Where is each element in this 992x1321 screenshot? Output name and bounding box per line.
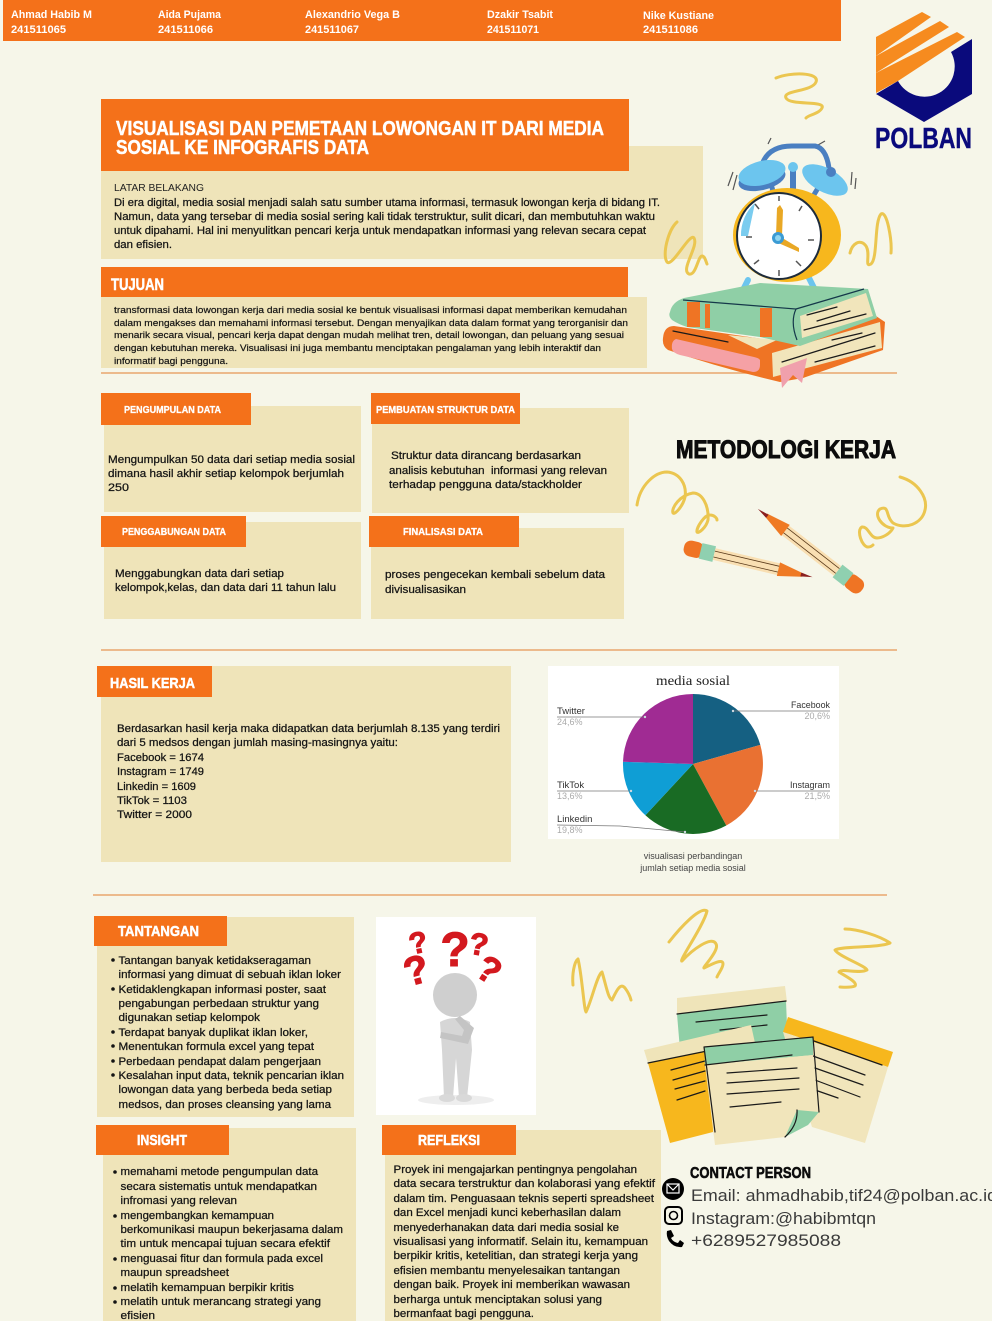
heading: hasil kerja	[97, 666, 212, 697]
logo: POLBAN	[875, 12, 972, 155]
pie chart: media sosial: Linkedin	[557, 814, 592, 825]
card: finalisasi data: proses pengecekan kembali sebelum data	[385, 569, 606, 581]
card: penggabungan data: kelompok,kelas, dan data dari 11 tahun lalu	[115, 582, 336, 594]
icon: sticky notes and squiggles	[573, 910, 893, 1145]
card: pengumpulan data: Mengumpulkan 50 data dari setiap media sosial	[108, 454, 355, 466]
text: tujuan body	[114, 305, 628, 367]
icon: email	[662, 1178, 684, 1200]
text: hasil kerja body	[117, 723, 500, 821]
text: hasil kerja body: TikTok = 1103	[117, 795, 187, 807]
heading: refleksi: REFLEKSI	[418, 1132, 480, 1149]
list: insight: mengembangkan kemampuan	[120, 1210, 274, 1222]
text: tujuan body: menarik secara visual, pencari kerja dapat dengan mudah melihat tren, detail lowongan, dan peluang yang sesuai	[114, 330, 624, 341]
list: tantangan: Ketidaklengkapan informasi poster, saat	[118, 984, 326, 996]
pie chart: media sosial: Facebook	[791, 700, 830, 711]
text: refleksi body: efisien membantu menyelesaikan tantangan	[394, 1265, 620, 1277]
pie chart: media sosial: TikTok	[557, 780, 584, 791]
text: tujuan body: informatif bagi pengguna.	[114, 356, 228, 367]
header bar: team members: Nike Kustiane	[643, 10, 714, 22]
image: thinking figure with question marks: ?	[466, 926, 491, 963]
list: tantangan: digunakan setiap kelompok	[118, 1012, 261, 1024]
heading: metodologi kerja: METODOLOGI KERJA	[676, 436, 896, 464]
heading: refleksi	[382, 1125, 516, 1155]
image: thinking figure with question marks: ?	[469, 946, 509, 993]
image: thinking figure with question marks: ?	[406, 925, 431, 962]
list: insight: infromasi yang relevan	[120, 1195, 237, 1207]
heading: insight: INSIGHT	[137, 1132, 187, 1149]
text: latar belakang body: untuk dipahami. Hal ini menyulitkan pencari kerja untuk mendapatkan informasi yang relevan secara cepat	[114, 225, 646, 237]
caption: pie chart: jumlah setiap media sosial	[639, 863, 746, 873]
squiggle: top right	[776, 74, 822, 118]
card: finalisasi data	[369, 516, 624, 619]
card: pengumpulan data: 250	[108, 482, 129, 494]
text: refleksi body: dan Excel menjadi kunci keberhasilan dalam	[394, 1207, 621, 1219]
pie chart: media sosial	[548, 666, 839, 839]
header bar: team members: 241511086	[643, 24, 698, 36]
pie chart: media sosial: 21,5%	[804, 791, 830, 801]
card: penggabungan data: Menggabungkan data dari setiap	[115, 568, 284, 580]
text: refleksi body: menyederhanakan data dari media sosial ke	[394, 1222, 619, 1234]
text: refleksi body: bermanfaat bagi pengguna.	[394, 1308, 534, 1320]
text: hasil kerja body: dari 5 medsos dengan jumlah masing-masingnya yaitu:	[117, 737, 398, 749]
card: pembuatan struktur data: PEMBUATAN STRUKTUR DATA	[376, 405, 515, 416]
text: phone: +6289527985088	[691, 1231, 841, 1250]
text: latar belakang body: Namun, data yang tersebar di media sosial sering kali tidak terstruktur, sulit dicari, dan membutuhkan waktu	[114, 211, 655, 223]
heading: tujuan: TUJUAN	[111, 275, 164, 294]
panel: refleksi	[382, 1125, 661, 1321]
text: refleksi body: visualisasi yang informatif. Selain itu, kemampuan	[394, 1236, 648, 1248]
header bar: team members: 241511067	[305, 24, 359, 36]
text: refleksi body: dengan baik. Proyek ini memberikan wawasan	[394, 1279, 630, 1291]
caption: pie chart	[639, 851, 746, 873]
caption: pie chart: visualisasi perbandingan	[644, 851, 742, 861]
heading: tantangan	[94, 916, 227, 946]
text: instagram: Instagram:@habibmtqn	[691, 1209, 876, 1228]
card: penggabungan data: PENGGABUNGAN DATA	[122, 527, 226, 538]
text: tujuan body: transformasi data lowongan kerja dari media sosial ke bentuk visualisasi informasi dapat memberikan kemudahan	[114, 305, 627, 316]
icon: alarm clock on books	[663, 138, 891, 388]
pie chart: media sosial: media sosial	[656, 674, 730, 689]
text: hasil kerja body: Twitter = 2000	[117, 809, 192, 821]
panel: tujuan	[101, 267, 647, 368]
pencil two	[753, 503, 867, 596]
pie chart: media sosial: 13,6%	[557, 791, 583, 801]
heading: insight	[96, 1125, 229, 1155]
header bar: team members: 241511066	[158, 24, 213, 36]
panel: tantangan	[94, 916, 354, 1117]
text: email: Email: ahmadhabib,tif24@polban.ac.id	[691, 1186, 992, 1205]
title	[101, 99, 629, 171]
text: latar belakang body: Di era digital, media sosial menjadi salah satu sumber utama informasi, termasuk lowongan kerja di bidang IT.	[114, 197, 660, 209]
title: SOSIAL KE INFOGRAFIS DATA	[116, 137, 369, 159]
heading: tujuan	[101, 267, 628, 297]
list: tantangan	[111, 955, 344, 1111]
text: latar belakang body	[114, 197, 660, 251]
card: penggabungan data	[101, 516, 361, 619]
pie chart: media sosial: 24,6%	[557, 717, 583, 727]
image: thinking figure with question marks: ?	[399, 947, 434, 995]
green book	[669, 283, 877, 346]
header bar: team members: Alexandrio Vega B	[305, 9, 400, 21]
list: insight: tim untuk mencapai tujuan secara efektif	[120, 1238, 331, 1250]
card: pembuatan struktur data: terhadap pengguna data/stackholder	[389, 479, 582, 491]
text: tujuan body: dalam mengakses dan memahami informasi tersebut. Dengan menyajikan data dalam format yang terorganisir dan	[114, 318, 628, 329]
heading: hasil kerja: HASIL KERJA	[110, 675, 195, 692]
orange book	[663, 316, 885, 382]
contact person	[662, 1165, 992, 1250]
list: insight: menguasai fitur dan formula pada excel	[120, 1253, 323, 1265]
list: tantangan: medsos, dan proses cleansing yang lama	[118, 1099, 332, 1111]
squiggles beside clock	[665, 138, 891, 274]
icon: pencils and squiggles	[637, 472, 926, 596]
heading: tantangan: TANTANGAN	[118, 923, 199, 940]
text: latar belakang body: dan efisien.	[114, 239, 172, 251]
list: tantangan: Perbedaan pendapat dalam pengerjaan	[118, 1056, 321, 1068]
list: tantangan: pengabungan perbedaan struktur yang	[118, 998, 319, 1010]
list: insight: memahami metode pengumpulan data	[120, 1166, 319, 1178]
header bar: team members: 241511071	[487, 24, 539, 36]
list: tantangan: Menentukan formula excel yang tepat	[118, 1041, 314, 1053]
image: thinking figure with question marks: ?	[440, 924, 470, 977]
text: refleksi body: berharga untuk menciptakan solusi yang	[394, 1294, 602, 1306]
text: refleksi body: Proyek ini mengajarkan pentingnya pengolahan	[394, 1164, 637, 1176]
pie chart: media sosial: Twitter	[557, 706, 585, 717]
list: tantangan: informasi yang dimuat di sebuah iklan loker	[118, 969, 341, 981]
card: pembuatan struktur data	[371, 393, 629, 513]
text: hasil kerja body: Berdasarkan hasil kerja maka didapatkan data berjumlah 8.135 yang terdiri	[117, 723, 500, 735]
icon: instagram	[665, 1207, 682, 1224]
card: pengumpulan data: dimana hasil akhir setiap kelompok berjumlah	[108, 468, 344, 480]
text: refleksi body: berpikir kritis, ketelitian, dan strategi kerja yang	[394, 1250, 638, 1262]
title: VISUALISASI DAN PEMETAAN LOWONGAN IT DARI MEDIA	[116, 118, 604, 140]
text: hasil kerja body: Instagram = 1749	[117, 766, 204, 778]
header bar: team members: Dzakir Tsabit	[487, 9, 553, 21]
header bar: team members: Aida Pujama	[158, 9, 222, 21]
pie chart: media sosial: 20,6%	[804, 711, 830, 721]
text: refleksi body	[394, 1164, 656, 1320]
list: insight: melatih untuk merancang strategi yang	[120, 1296, 321, 1308]
list: insight	[113, 1166, 343, 1321]
panel: insight	[96, 1125, 356, 1321]
card: pengumpulan data: PENGUMPULAN DATA	[124, 405, 221, 416]
text: tujuan body: dengan kebutuhan mereka. Visualisasi ini juga membantu menciptakan pengalaman yang lebih interaktif dan	[114, 343, 601, 354]
text: hasil kerja body: Linkedin = 1609	[117, 781, 196, 793]
pie chart: media sosial: Instagram	[790, 780, 830, 791]
header bar: team members: 241511065	[11, 24, 66, 36]
card: finalisasi data: FINALISASI DATA	[403, 527, 483, 538]
list: insight: secara sistematis untuk mendapatkan	[120, 1181, 317, 1193]
list: tantangan: lowongan data yang berbeda beda setiap	[118, 1084, 332, 1096]
icon: phone	[667, 1230, 684, 1247]
header bar: team members: Ahmad Habib M	[11, 9, 92, 21]
image: thinking figure with question marks	[376, 917, 536, 1115]
heading: contact person: CONTACT PERSON	[690, 1165, 811, 1182]
card: pengumpulan data	[101, 393, 361, 512]
heading: latar belakang: LATAR BELAKANG	[114, 182, 204, 194]
list: insight: melatih kemampuan berpikir kritis	[120, 1282, 295, 1294]
pencil one	[682, 539, 814, 585]
card: pembuatan struktur data: analisis kebutuhan informasi yang relevan	[389, 465, 607, 477]
card: finalisasi data: divisualisasikan	[385, 584, 466, 596]
panel: hasil kerja	[97, 666, 511, 862]
text: refleksi body: dalam tim. Penguasaan teknis seperti spreadsheet	[394, 1193, 654, 1205]
text: refleksi body: data secara terstruktur dan kolaborasi yang efektif	[394, 1178, 656, 1190]
list: tantangan: Kesalahan input data, teknik pencarian iklan	[118, 1070, 344, 1082]
pie chart: media sosial: 19,8%	[557, 825, 583, 835]
text: hasil kerja body: Facebook = 1674	[117, 752, 204, 764]
section: metodologi kerja	[101, 393, 629, 619]
header bar: team members	[3, 0, 841, 41]
list: insight: berkomunikasi maupun bekerjasama dalam	[120, 1224, 343, 1236]
list: insight: maupun spreadsheet	[120, 1267, 229, 1279]
list: tantangan: Tantangan banyak ketidakseragaman	[118, 955, 311, 967]
card: pembuatan struktur data: Struktur data dirancang berdasarkan	[391, 450, 581, 462]
panel: latar belakang	[101, 146, 703, 259]
list: tantangan: Terdapat banyak duplikat iklan loker,	[118, 1027, 308, 1039]
